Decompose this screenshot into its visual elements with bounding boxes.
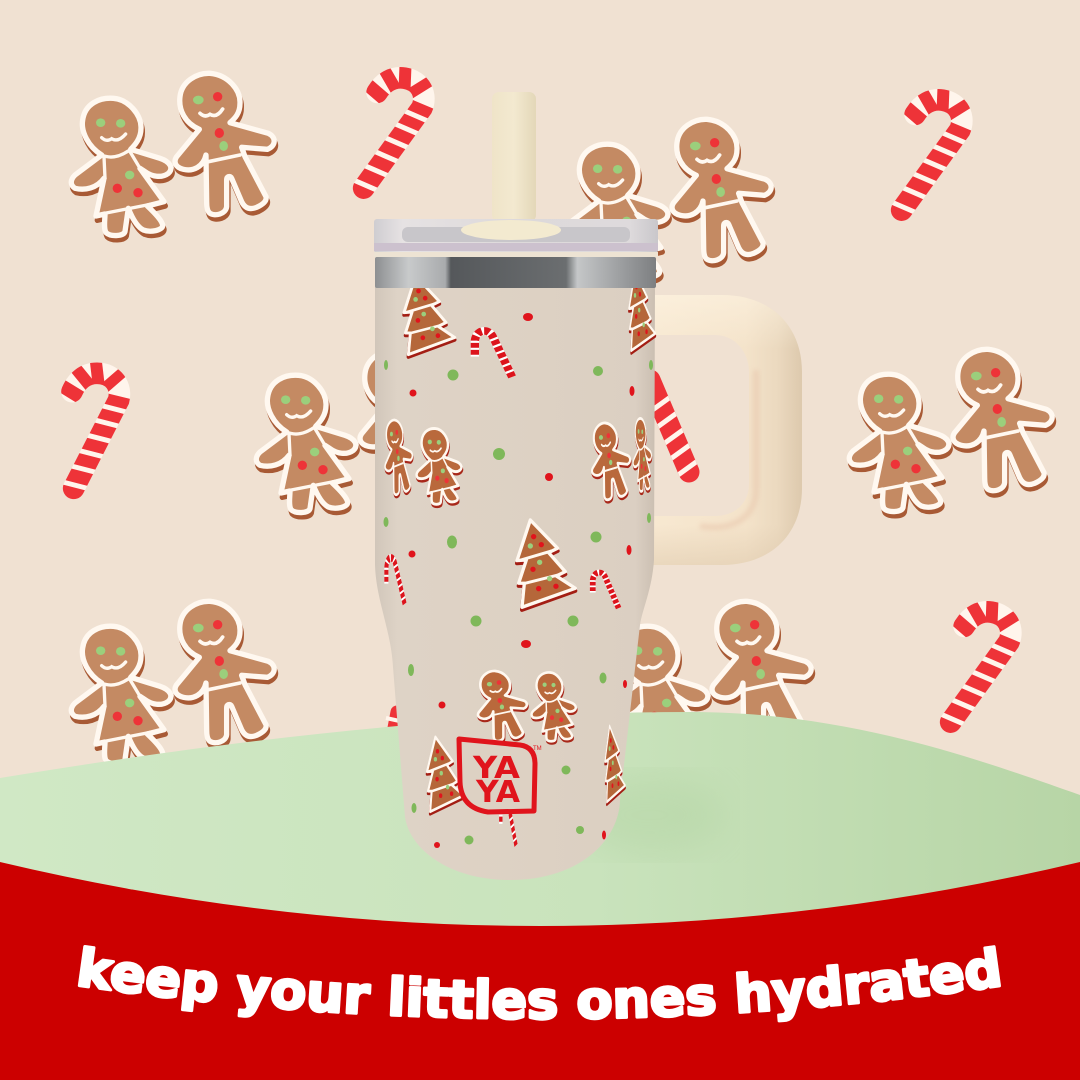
pattern: candy cane top xyxy=(337,54,449,220)
pattern: candy cane top right xyxy=(875,76,987,242)
pattern: gingerbread couple middle left xyxy=(256,350,461,517)
print: green dots xyxy=(384,360,653,844)
pattern: candy cane bottom right xyxy=(924,588,1036,754)
print: red dots xyxy=(408,313,634,848)
print: mini candy canes xyxy=(386,331,619,845)
slogan: keep your littles ones hydrated xyxy=(78,945,1001,1022)
red banner xyxy=(0,862,1080,1080)
body xyxy=(375,286,655,880)
clear lid xyxy=(374,219,658,257)
print: gingerbread group upper left xyxy=(385,420,462,507)
print: gingerbread group lower xyxy=(478,671,576,743)
pattern: gingerbread couple bottom left xyxy=(71,601,276,768)
print: gingerbread group upper right xyxy=(592,418,652,502)
print: cookie trees xyxy=(404,272,655,814)
logo: YAYA: YA xyxy=(472,751,521,786)
logo: YAYA: YA xyxy=(475,775,521,810)
pattern: gingerbread couple top centre xyxy=(568,119,773,286)
pattern: candy cane behind tumbler base xyxy=(386,712,404,728)
silver rim xyxy=(375,257,656,288)
tumbler xyxy=(374,92,802,880)
pattern: gingerbread couple bottom centre xyxy=(608,601,813,768)
tumbler shadow xyxy=(575,775,725,855)
green hill xyxy=(0,712,1080,1000)
pattern: gingerbread couple middle right xyxy=(849,349,1054,516)
straw xyxy=(492,92,536,222)
logo: YAYA: TM xyxy=(533,746,542,752)
logo: YAYA xyxy=(459,739,542,812)
pattern: gingerbread couple top left xyxy=(71,73,276,240)
pattern: candy cane behind handle xyxy=(654,370,700,482)
pattern: candy cane middle left xyxy=(50,357,139,510)
handle xyxy=(640,295,802,565)
